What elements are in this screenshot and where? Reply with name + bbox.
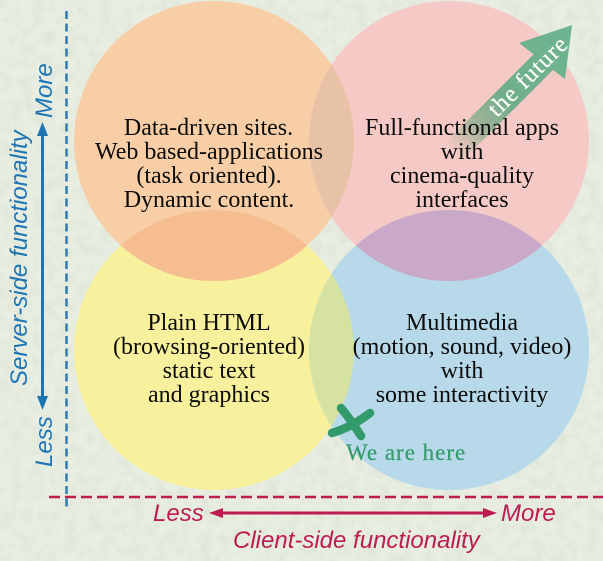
- text: data-driven sites: (task oriented).: [136, 163, 282, 189]
- text: multimedia: Multimedia: [406, 310, 518, 336]
- text: plain HTML: (browsing-oriented): [113, 334, 305, 360]
- arrow: client-side double arrow: [209, 508, 497, 518]
- overlap: top circles: [309, 65, 354, 217]
- circle: plain HTML: [74, 210, 354, 490]
- label: server-side functionality: Server-side functionality: [6, 128, 33, 386]
- text: data-driven sites: Dynamic content.: [124, 187, 294, 213]
- text: data-driven sites: Data-driven sites.: [124, 115, 293, 141]
- text: plain HTML: Plain HTML: [147, 310, 271, 336]
- text: full-functional apps: with: [441, 139, 483, 165]
- circle: multimedia: [309, 210, 589, 490]
- label: less: Less: [153, 500, 204, 527]
- axis labels: client-side functionality: [153, 500, 556, 554]
- label: the future: the future: [483, 31, 574, 122]
- label: less: Less: [31, 416, 58, 467]
- overlap: bottom circles: [309, 274, 354, 426]
- text: plain HTML: static text: [163, 358, 256, 384]
- arrow: server-side double arrow: [37, 122, 48, 410]
- axis labels: server-side functionality: [6, 63, 58, 467]
- overlap: left circles: [121, 210, 307, 281]
- text: multimedia: with: [441, 358, 483, 384]
- label: more: More: [501, 500, 556, 527]
- arrow: the future: [445, 25, 574, 158]
- text: full-functional apps: cinema-quality: [390, 163, 534, 189]
- text: data-driven sites: Web based-applications: [95, 139, 323, 165]
- text: full-functional apps: Full-functional apps: [365, 115, 559, 141]
- label: we are here: We are here: [346, 440, 466, 465]
- text: multimedia: (motion, sound, video): [353, 334, 571, 360]
- text: full-functional apps: interfaces: [415, 187, 509, 213]
- overlap: right circles: [356, 210, 542, 281]
- label: client-side functionality: Client-side functionality: [233, 527, 482, 554]
- text: multimedia: some interactivity: [376, 382, 548, 408]
- icon: green cross: [332, 408, 370, 436]
- circle: full-functional apps: [309, 1, 589, 281]
- marker: we are here: [332, 408, 466, 465]
- axis: server-side dashed line: [65, 11, 68, 510]
- panel: four overlapping circles: [74, 1, 589, 490]
- circle: data-driven sites: [74, 1, 354, 281]
- text: plain HTML: and graphics: [148, 382, 270, 408]
- label: more: More: [31, 63, 58, 118]
- axis: client-side dashed line: [49, 496, 603, 498]
